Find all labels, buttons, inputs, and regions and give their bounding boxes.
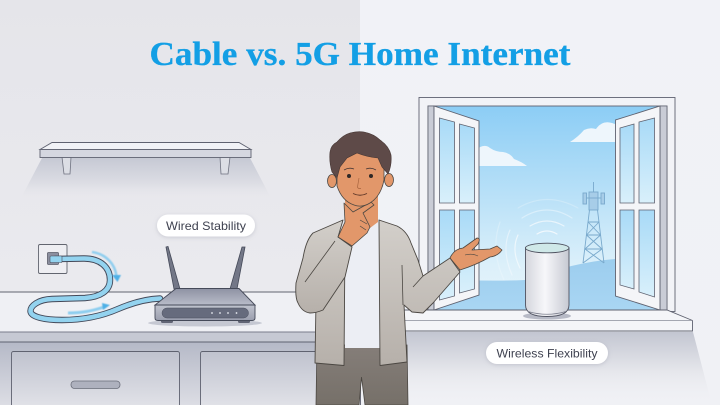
cardigan right panel and arm <box>379 220 460 366</box>
cell tower <box>583 182 604 263</box>
kitchen counter and cabinets <box>0 292 360 405</box>
nose and mouth <box>358 178 361 189</box>
drawer left <box>12 352 180 405</box>
cable flow arrows <box>68 252 121 313</box>
neck <box>345 196 378 234</box>
t-shirt <box>344 218 380 348</box>
eyes <box>347 174 351 178</box>
label: wireless flexibility <box>486 342 608 364</box>
right shutter <box>616 106 667 310</box>
wall outlet <box>38 244 67 274</box>
cardigan left arm <box>296 220 352 313</box>
5G home router <box>523 243 571 320</box>
cardigan left panel <box>315 228 345 366</box>
chin hand <box>338 202 374 246</box>
antennas <box>166 246 245 289</box>
view: sky, clouds, hills <box>428 106 667 311</box>
left shutter <box>428 106 479 310</box>
drawer right <box>200 352 360 405</box>
person <box>296 132 502 405</box>
window <box>419 98 675 312</box>
wall shelf <box>20 142 272 200</box>
wired router <box>148 246 262 326</box>
head <box>328 132 394 206</box>
label: wired stability <box>157 214 255 236</box>
signal waves <box>496 200 578 280</box>
open hand <box>450 238 502 270</box>
title: Cable vs. 5G Home Internet <box>150 36 571 73</box>
cloud right <box>570 122 634 142</box>
label: wireless flexibility: Wireless Flexibility <box>496 346 598 360</box>
trousers <box>316 345 408 405</box>
cable <box>30 258 160 320</box>
label: wired stability: Wired Stability <box>166 219 246 233</box>
cloud left <box>450 146 527 166</box>
hair <box>330 132 391 178</box>
window sill <box>395 310 693 331</box>
cable plug <box>50 256 62 262</box>
